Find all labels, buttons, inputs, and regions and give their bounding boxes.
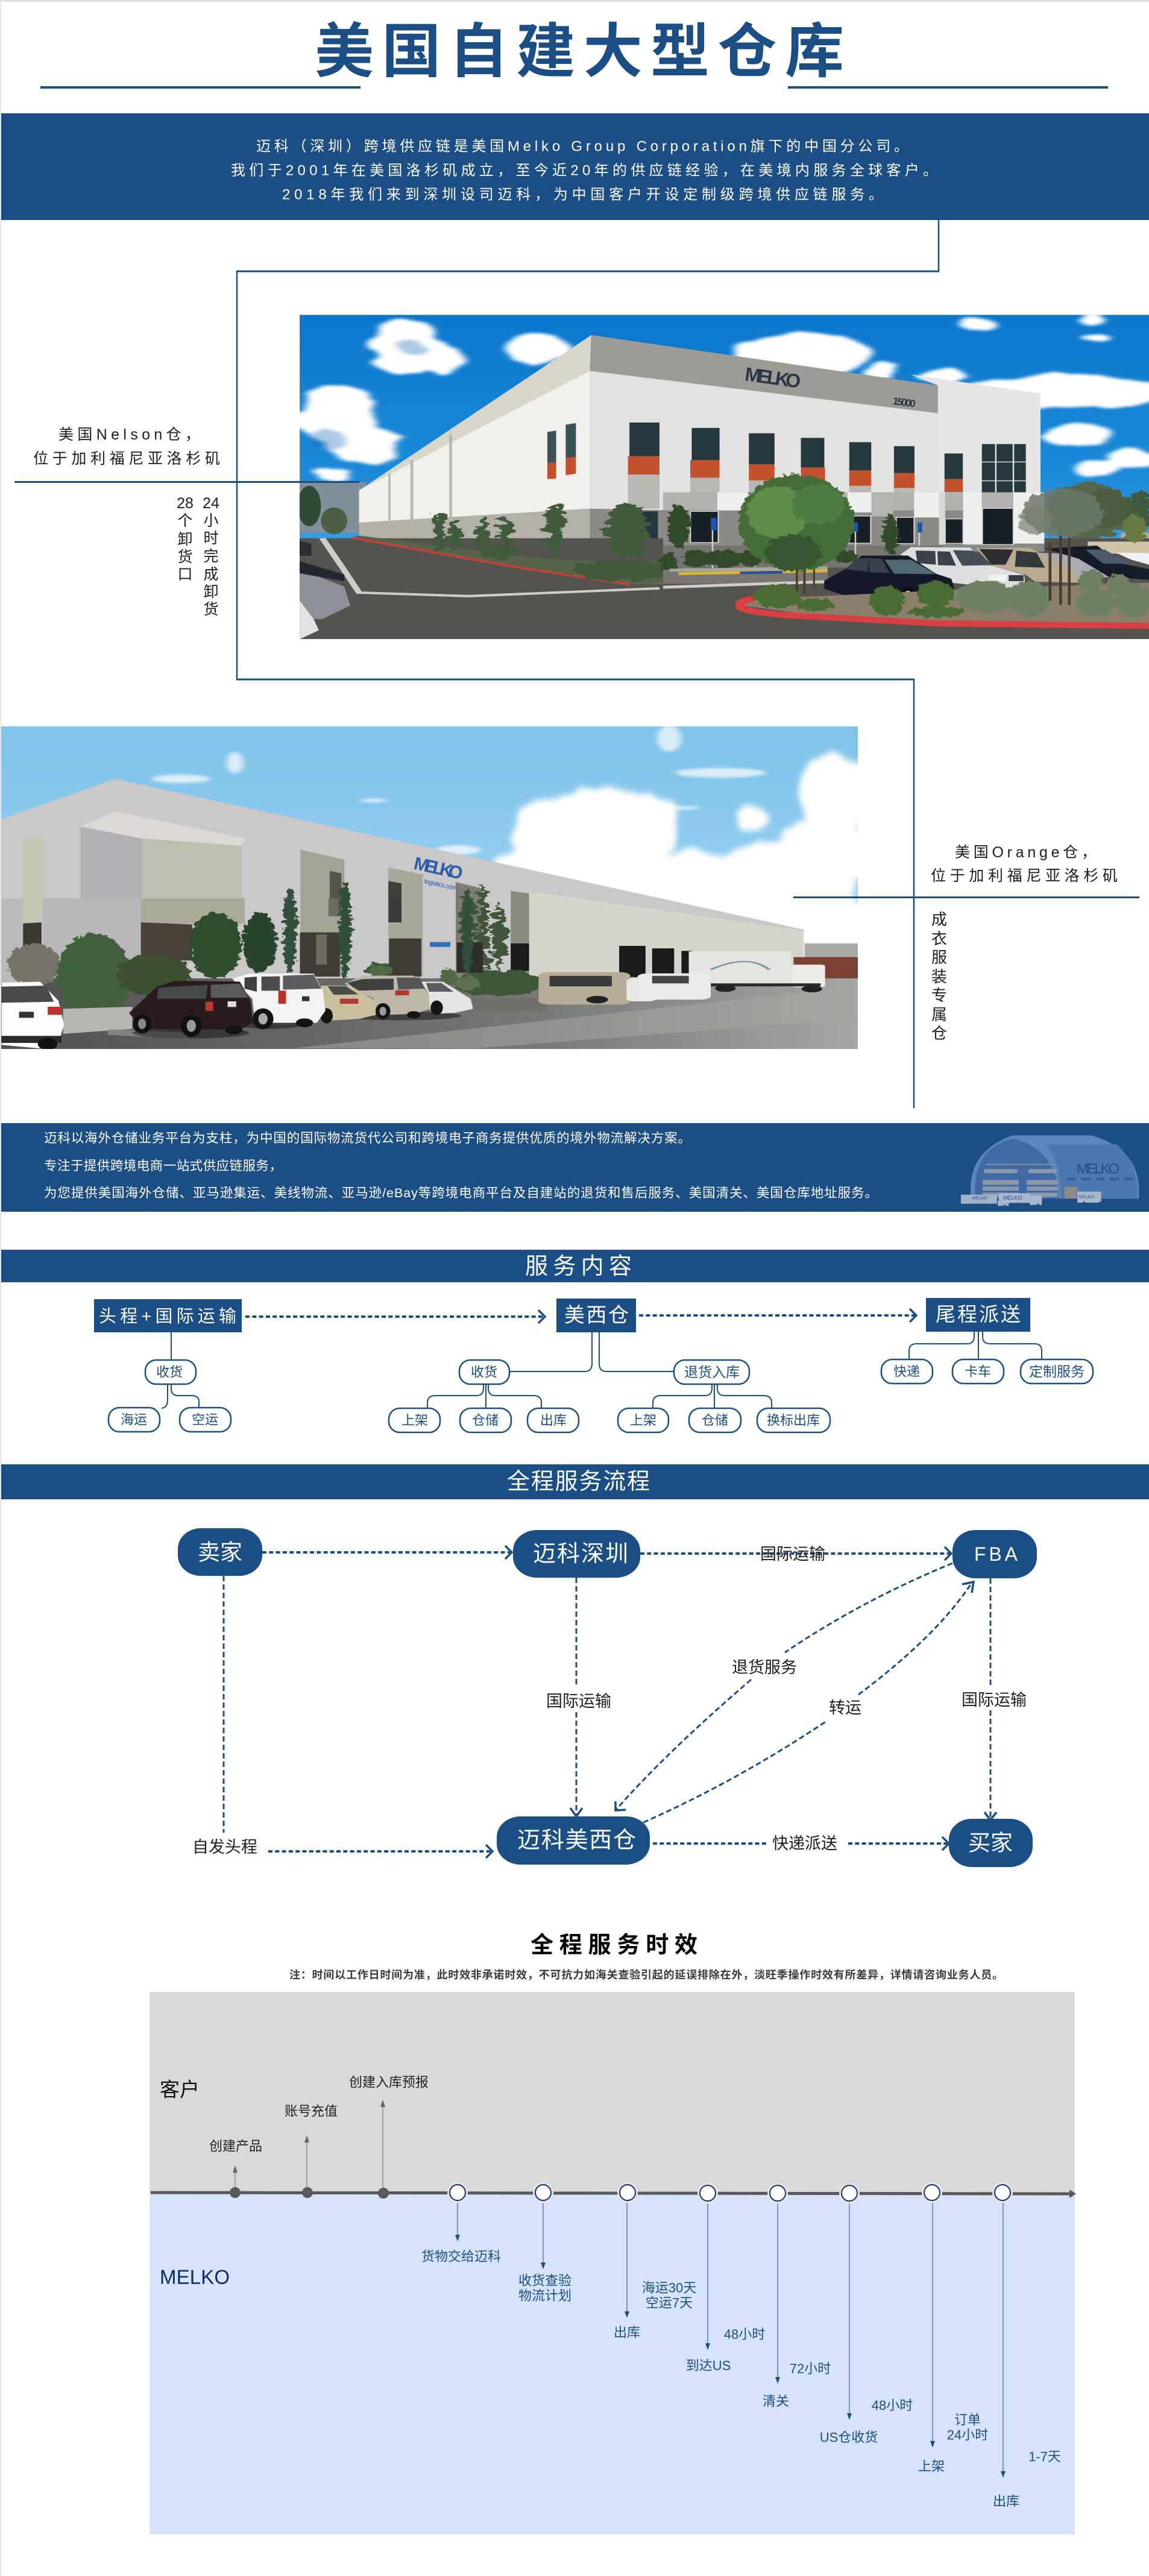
Melko steps: 48小时	[724, 2327, 765, 2341]
pills: US west receiving: 收货	[471, 1365, 497, 1379]
intro text: 2018年我们来到深圳设司迈科，为中国客户开设定制级跨境供应链服务。	[282, 187, 883, 203]
pills: last mile: 快递	[893, 1364, 920, 1379]
vertical note: 24 hour unloading: 时	[203, 530, 219, 547]
panel: business summary	[1, 1123, 1149, 1212]
box: first leg and international transport	[94, 1299, 242, 1332]
vertical note: apparel warehouse: 衣	[931, 930, 947, 948]
vertical note: 28 docks: 货	[177, 549, 193, 565]
vertical note: apparel warehouse: 专	[931, 986, 947, 1004]
pills: US west returns: 退货入库	[684, 1364, 740, 1380]
Melko steps: 1-7天	[1028, 2449, 1061, 2464]
branch connectors	[162, 1332, 1042, 1408]
flow labels: 退货服务	[732, 1658, 797, 1677]
text: Nelson warehouse: 位于加利福尼亚洛杉矶	[33, 450, 220, 467]
box: last mile delivery: 尾程派送	[936, 1303, 1021, 1325]
Melko steps: 订单	[954, 2413, 981, 2427]
vertical note: 28 docks	[177, 495, 194, 583]
summary text	[44, 1131, 878, 1200]
flow labels: 国际运输	[962, 1691, 1027, 1709]
node: seller: 卖家	[198, 1540, 242, 1565]
heading: service lead times	[289, 1933, 1003, 1981]
box: US west warehouse: 美西仓	[564, 1304, 629, 1327]
photo: Nelson warehouse	[297, 313, 1149, 642]
pills: last mile: 定制服务	[1029, 1364, 1084, 1379]
heading: full service flow	[1, 1464, 1149, 1499]
icon: warehouse: MELKO	[1003, 1195, 1022, 1201]
text: Orange warehouse: 位于加利福尼亚洛杉矶	[931, 868, 1118, 884]
photo: Orange warehouse: MELKO	[412, 854, 465, 884]
flow labels: 国际运输	[760, 1545, 825, 1563]
node: FBA: FBA	[974, 1543, 1018, 1565]
panel: company intro	[1, 113, 1149, 220]
vertical note: 28 docks: 个	[177, 512, 193, 529]
node: Melko Shenzhen	[513, 1530, 640, 1578]
Melko steps: 空运7天	[646, 2296, 693, 2310]
flow labels: 快递派送	[772, 1834, 837, 1853]
Melko steps: 出库	[614, 2325, 640, 2340]
summary text: 为您提供美国海外仓储、亚马逊集运、美线物流、亚马逊/eBay等跨境电商平台及自建站的退货和售后服务、美国清关、美国仓库地址服务。	[44, 1186, 878, 1200]
pills: last mile: 卡车	[965, 1364, 991, 1379]
arrow: seller to Melko Shenzhen	[262, 1546, 512, 1559]
title	[40, 18, 1108, 89]
vertical note: 24 hour unloading: 24	[203, 495, 219, 512]
pills: US west returns: 上架	[630, 1413, 656, 1428]
heading: service lead times: 全程服务时效	[530, 1933, 697, 1958]
intro text	[231, 139, 937, 203]
Melko steps: 出库	[993, 2493, 1019, 2509]
heading: service content	[1, 1250, 1149, 1282]
arrow: US west to last mile	[639, 1309, 916, 1322]
chart: lead time swimlane	[150, 1992, 1076, 2534]
node: buyer: 买家	[968, 1830, 1013, 1856]
text: Nelson warehouse: 美国Nelson仓，	[58, 426, 200, 443]
pills: first leg: 收货	[156, 1365, 183, 1379]
foreground: parked cars and shrubs	[0, 882, 483, 1050]
vertical note: apparel warehouse	[931, 910, 947, 1042]
vertical note: apparel warehouse: 仓	[931, 1024, 947, 1042]
icon: warehouse: MELKO	[1077, 1161, 1119, 1177]
pills: first leg: 空运	[192, 1412, 218, 1428]
pills: first leg	[109, 1360, 231, 1432]
node: seller	[178, 1528, 262, 1576]
Melko steps: 货物交给迈科	[421, 2249, 501, 2264]
icon: warehouse	[961, 1135, 1139, 1208]
arrow: Melko Shenzhen to US west	[570, 1578, 582, 1816]
pills: first leg: 海运	[121, 1412, 147, 1428]
text: Orange warehouse: 美国Orange仓，	[955, 844, 1097, 861]
vertical note: apparel warehouse: 装	[931, 968, 947, 986]
Melko steps: US仓收货	[820, 2430, 878, 2445]
panel: customer lane	[150, 1992, 1075, 2193]
flow labels: 国际运输	[546, 1692, 611, 1710]
photo: Nelson warehouse: 15000	[892, 395, 916, 410]
note: 注：时间以工作日时间为准，此时效非承诺时效，不可抗力如海关查验引起的延误排除在外，淡旺季操作时效有所差异，详情请咨询业务人员。	[289, 1968, 1003, 1981]
vertical note: apparel warehouse: 服	[931, 948, 947, 966]
heading: service content: 服务内容	[525, 1254, 632, 1279]
customer steps	[209, 2075, 429, 2199]
node: Melko US west	[497, 1816, 650, 1865]
pills: US west returns	[618, 1360, 830, 1432]
Melko steps: 到达US	[686, 2358, 731, 2373]
vertical note: 28 docks: 卸	[177, 531, 193, 548]
vertical note: 24 hour unloading: 货	[203, 601, 219, 618]
box: US west warehouse	[556, 1299, 636, 1332]
node: buyer	[949, 1819, 1033, 1867]
vertical note: 24 hour unloading: 卸	[203, 584, 219, 600]
vertical note: 24 hour unloading	[203, 495, 219, 618]
vertical note: apparel warehouse: 成	[931, 910, 947, 928]
vertical note: 28 docks: 口	[177, 566, 193, 583]
vertical note: 24 hour unloading: 完	[203, 548, 219, 565]
pills: US west returns: 仓储	[702, 1413, 728, 1428]
photo: Nelson warehouse: MELKO	[743, 363, 802, 392]
flow labels	[192, 1545, 1027, 1856]
title: 美国自建大型仓库	[315, 18, 844, 84]
photo: Orange warehouse	[0, 725, 874, 1050]
photo: Orange warehouse: logistics.com	[424, 878, 458, 892]
customer steps: 账号充值	[285, 2104, 338, 2118]
node: Melko Shenzhen: 迈科深圳	[533, 1542, 628, 1567]
vertical note: 24 hour unloading: 成	[203, 566, 219, 583]
flow labels: 自发头程	[192, 1838, 257, 1856]
arrow: Melko Shenzhen to FBA	[640, 1547, 951, 1560]
arrow: return service	[615, 1563, 952, 1810]
Melko steps: 海运30天	[642, 2280, 696, 2296]
summary text: 专注于提供跨境电商一站式供应链服务，	[44, 1159, 282, 1173]
heading: full service flow: 全程服务流程	[507, 1469, 650, 1494]
vertical note: 24 hour unloading: 小	[203, 512, 219, 529]
arrow: express delivery	[653, 1837, 949, 1850]
Melko steps: 72小时	[790, 2361, 831, 2376]
text: Orange warehouse	[793, 844, 1139, 1042]
Melko steps: 24小时	[947, 2427, 988, 2443]
foreground: cars, island and trees	[661, 474, 1149, 642]
Melko steps: 收货查验	[518, 2273, 571, 2288]
connector lines	[236, 220, 939, 1108]
Melko steps	[421, 2182, 1061, 2509]
summary text: 迈科以海外仓储业务平台为支柱，为中国的国际物流货代公司和跨境电子商务提供优质的境外物流解决方案。	[44, 1131, 691, 1145]
icon: warehouse: MELKO	[1079, 1195, 1094, 1200]
pills: US west receiving: 仓储	[472, 1413, 499, 1428]
Melko steps: 物流计划	[518, 2288, 571, 2303]
node: Melko US west: 迈科美西仓	[517, 1828, 636, 1853]
pills: US west receiving: 上架	[401, 1413, 428, 1428]
vertical note: 28 docks: 28	[177, 495, 194, 512]
customer steps: 创建产品	[209, 2139, 262, 2153]
box: first leg and international transport: 头程+国际运输	[99, 1306, 236, 1326]
pills: last mile	[881, 1359, 1093, 1384]
customer steps: 创建入库预报	[349, 2075, 429, 2089]
node: FBA	[952, 1530, 1037, 1578]
diagram: service flow	[178, 1528, 1037, 1867]
intro text: 我们于2001年在美国洛杉矶成立，至今近20年的供应链经验，在美境内服务全球客户。	[231, 163, 937, 178]
vertical note: apparel warehouse: 属	[931, 1006, 947, 1024]
Melko steps: 清关	[763, 2393, 789, 2409]
diagram: service content tree	[94, 1298, 1093, 1432]
box: last mile delivery	[926, 1298, 1030, 1332]
pills: US west receiving	[389, 1360, 579, 1432]
icon: warehouse: MELKO	[972, 1196, 987, 1201]
text: Nelson warehouse	[14, 426, 359, 618]
pills: US west receiving: 出库	[540, 1413, 567, 1428]
label: MELKO: MELKO	[160, 2266, 230, 2288]
Melko steps: 48小时	[872, 2398, 913, 2413]
arrow: FBA to buyer	[984, 1578, 996, 1820]
arrow: transfer	[643, 1582, 974, 1822]
intro text: 迈科（深圳）跨境供应链是美国Melko Group Corporation旗下的中国分公司。	[256, 139, 908, 154]
pills: US west returns: 换标出库	[767, 1413, 820, 1428]
Melko steps: 上架	[918, 2458, 945, 2474]
arrow: seller self shipping	[224, 1576, 493, 1858]
cars	[132, 1012, 461, 1039]
arrow: first leg to US west	[245, 1310, 545, 1323]
label: customer: 客户	[160, 2079, 200, 2100]
flow labels: 转运	[829, 1699, 861, 1717]
panel: Melko lane	[150, 2193, 1075, 2534]
timeline axis	[151, 2190, 1076, 2198]
